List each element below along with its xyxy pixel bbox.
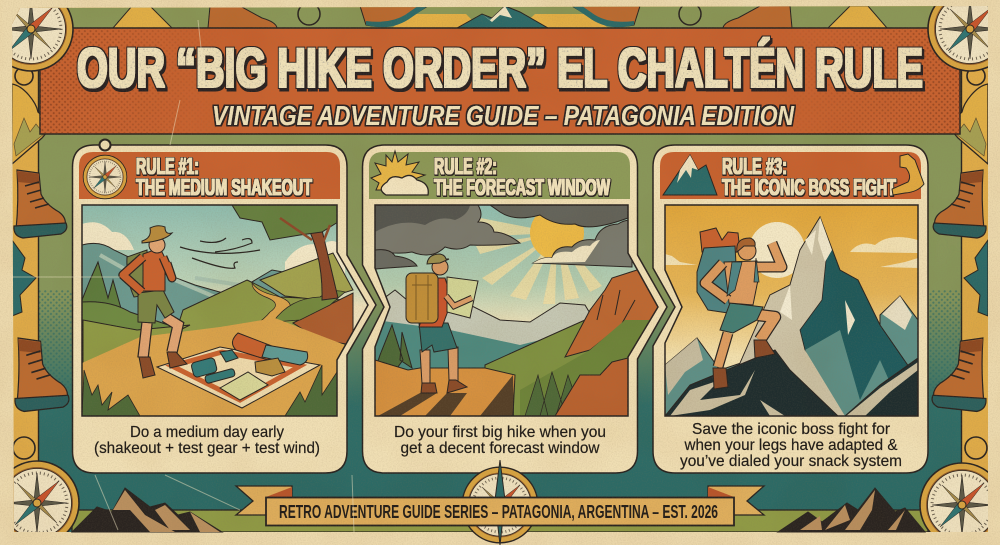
footer ribbon [236,486,764,526]
rule heading [434,153,610,200]
right boots [932,170,986,411]
body text: (shakeout + test gear + test wind) [94,440,320,457]
body text [680,421,902,470]
muscular hiker [700,228,740,252]
body text [394,424,606,457]
corner compass bottom left [14,460,80,532]
banner halftone [40,29,960,133]
card body [653,145,928,473]
header band [660,152,921,199]
mountain highlights [113,490,905,532]
yellow block [392,14,608,28]
left teal mountain [12,240,36,316]
corner compass bottom right [919,462,988,532]
hiker with map [420,347,458,384]
body text: when your legs have adapted & [684,437,898,454]
rule heading: RULE #1: [136,153,199,179]
image outline [375,205,658,416]
halftone side panels [39,290,961,393]
footer text: RETRO ADVENTURE GUIDE SERIES – PATAGONIA, ARGENTINA – EST. 2026 [279,502,718,522]
teal mountains [457,6,548,28]
rule heading [722,153,896,200]
olive bottom strip [72,510,928,532]
rule heading: RULE #2: [434,153,497,179]
grass tufts [82,365,337,416]
blanket [157,347,320,408]
body text: Save the iconic boss fight for [692,421,891,438]
card body [72,145,376,473]
body text [94,424,320,457]
rule heading: THE MEDIUM SHAKEOUT [136,174,312,200]
banner [40,28,960,134]
card body [362,145,667,473]
body text: you’ve dialed your snack system [680,453,902,470]
ribbon body [266,498,734,526]
rule heading: THE ICONIC BOSS FIGHT [722,174,896,200]
illustration: hiker shakeout [82,205,372,416]
rule heading: RULE #3: [722,153,787,179]
body text: Do your first big hike when you [394,424,606,441]
header band [369,152,630,199]
header band [79,152,340,199]
bottom mountains right [778,488,925,532]
illustration: forecast window [375,205,665,416]
left boots [14,170,69,411]
rule heading: THE FORECAST WINDOW [434,174,610,200]
icon: mountain [663,155,717,195]
footer compass [462,460,538,545]
illustration: boss fight [665,205,918,420]
left strip bells [12,69,46,164]
image outline [82,205,368,416]
image outline [665,205,918,416]
panel: rule 2 [362,145,667,473]
mountains yellow [113,6,887,28]
panel: rule 3 [653,145,928,473]
body text: Do a medium day early [130,424,284,441]
right strip bells [954,70,988,165]
body text: get a decent forecast window [400,440,600,457]
right teal mountain [964,240,988,316]
scratches [10,20,354,532]
bottom mountains left [72,488,222,532]
rings [297,6,702,26]
ribbon tails [236,486,292,515]
corner compass top right [927,6,988,72]
fold tabs [266,487,734,497]
strip lines [38,8,962,462]
icon: sun and cloud [371,151,428,195]
top strip illustrations [112,6,887,28]
rule heading [136,153,312,200]
panel: rule 1 [72,140,376,473]
icon: flexed arm [892,154,924,195]
hiker [127,250,148,297]
lower pendants [13,437,987,459]
subtitle: VINTAGE ADVENTURE GUIDE – PATAGONIA EDITION [212,100,795,131]
corner compass top left [12,8,74,72]
icon: pocket compass [83,140,127,199]
top boots [208,6,792,28]
